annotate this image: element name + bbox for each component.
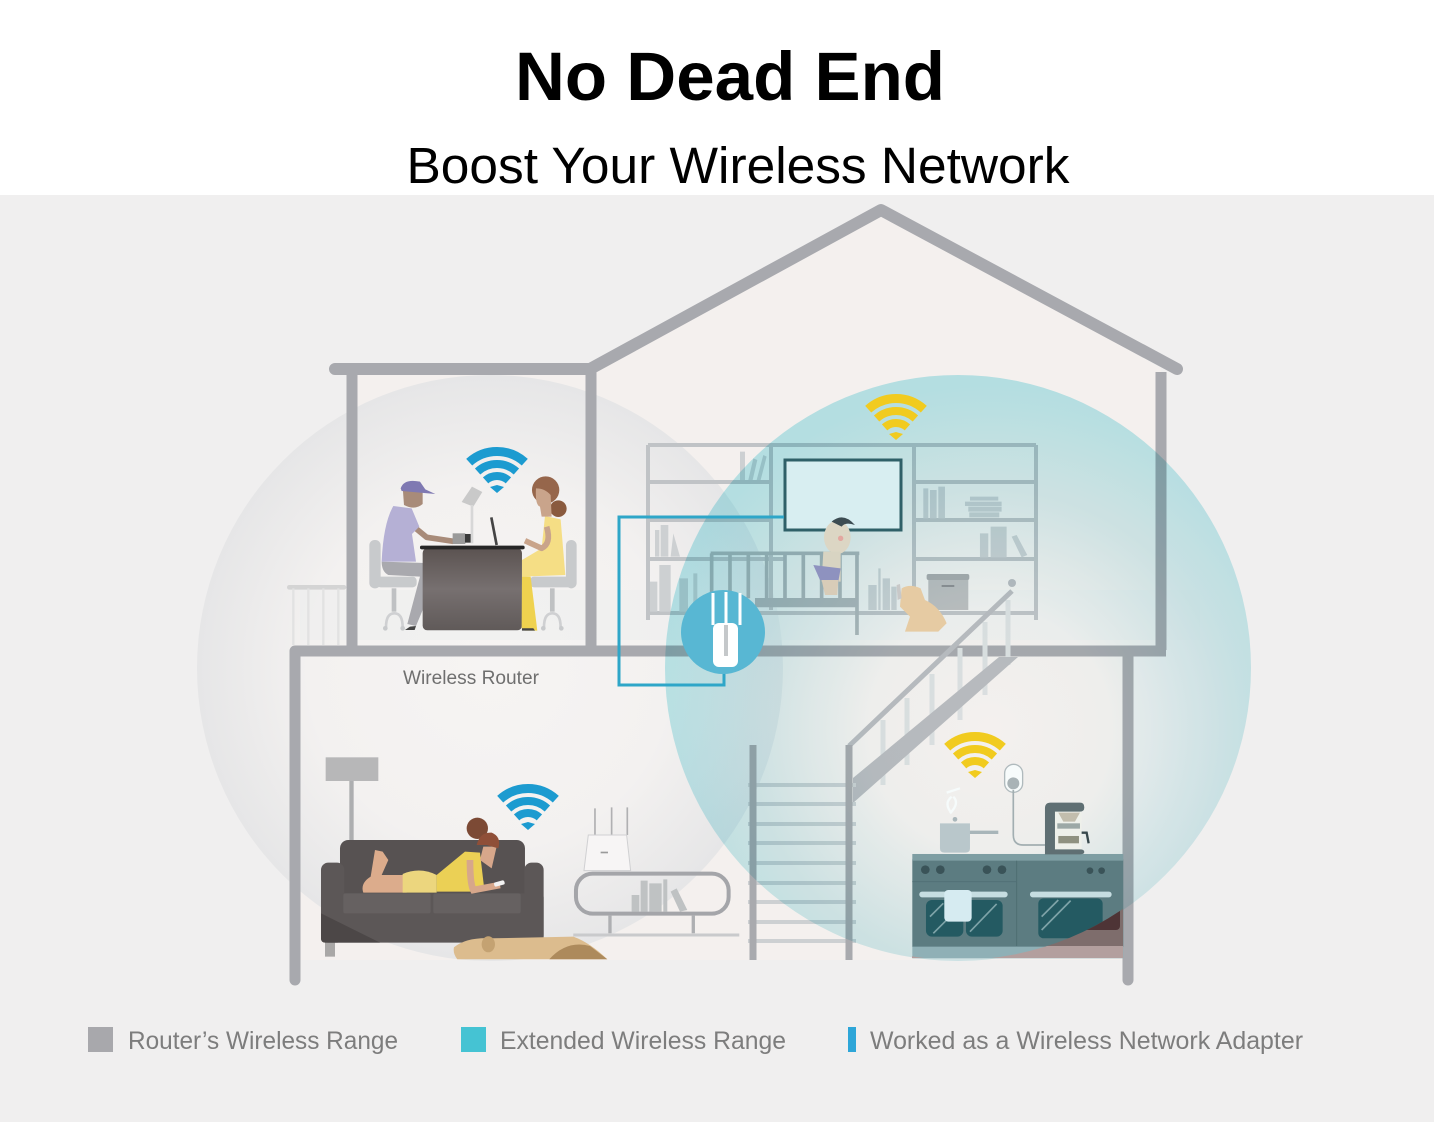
- extended range circle: [665, 375, 1251, 961]
- console table: [573, 874, 739, 935]
- crib: [711, 553, 859, 635]
- wifi icon: kitchen: [947, 737, 1003, 778]
- wifi icon: living room: [500, 789, 556, 830]
- sofa: [321, 840, 544, 957]
- puppy: [897, 584, 947, 632]
- stringer: [853, 657, 1018, 803]
- legend: adapter swatch: [848, 1027, 856, 1052]
- router range circle: [197, 375, 783, 961]
- wall shelves: [648, 445, 1036, 620]
- antennas: [713, 592, 740, 625]
- left chair: [369, 540, 417, 631]
- extender body: [713, 623, 738, 667]
- cooker corner outside range: [912, 909, 1123, 958]
- shelf frame: [648, 445, 1036, 620]
- stair posts: [753, 745, 849, 960]
- legend: extended range swatch: [461, 1027, 486, 1052]
- upper stair balusters: [883, 600, 1008, 785]
- man: [382, 481, 453, 630]
- sleeping dog: [454, 936, 607, 959]
- title: No Dead End: [515, 38, 945, 115]
- legend: [88, 1027, 1303, 1055]
- legend: router range swatch: [88, 1027, 113, 1052]
- books: [650, 452, 1027, 612]
- subtitle: Boost Your Wireless Network: [406, 137, 1070, 194]
- staircase: [748, 579, 1018, 960]
- house structure: [295, 210, 1177, 980]
- coffee maker: [1045, 803, 1089, 854]
- stair treads: [748, 785, 856, 941]
- house interior: [295, 212, 1161, 960]
- living room: [321, 757, 739, 959]
- woman on sofa: [363, 818, 505, 893]
- desk: [420, 546, 525, 630]
- router on table: [584, 807, 631, 871]
- wifi icon: upper extended range: [868, 399, 924, 440]
- TV screen: [785, 460, 901, 530]
- router label: Wireless Router: [403, 668, 540, 689]
- right chair: [530, 540, 577, 631]
- badge circle: [681, 590, 765, 674]
- wifi icon: upper room: [469, 452, 525, 493]
- lamp and cup: [453, 487, 482, 544]
- extender slot: [724, 625, 728, 656]
- woman: [522, 476, 567, 631]
- legend: router range label: Router’s Wireless Range: [128, 1027, 398, 1055]
- upper room: two people at a desk: [289, 476, 577, 645]
- floor lamp: [326, 757, 378, 841]
- storage box: [927, 574, 969, 610]
- cooker: [912, 854, 1123, 958]
- kitchen: [912, 764, 1123, 958]
- floor band: [300, 590, 1200, 640]
- extender badge: [681, 590, 765, 674]
- saucepan: [940, 788, 998, 853]
- connection line: [619, 517, 784, 685]
- baby: [813, 517, 855, 595]
- left railing: [289, 587, 344, 645]
- legend: extended range label: Extended Wireless Range: [500, 1027, 786, 1055]
- wall plug and cord: [1005, 764, 1045, 845]
- legend: adapter label: Worked as a Wireless Network Adapter: [870, 1027, 1303, 1055]
- laptop: [491, 517, 497, 545]
- handrail: [849, 591, 1012, 746]
